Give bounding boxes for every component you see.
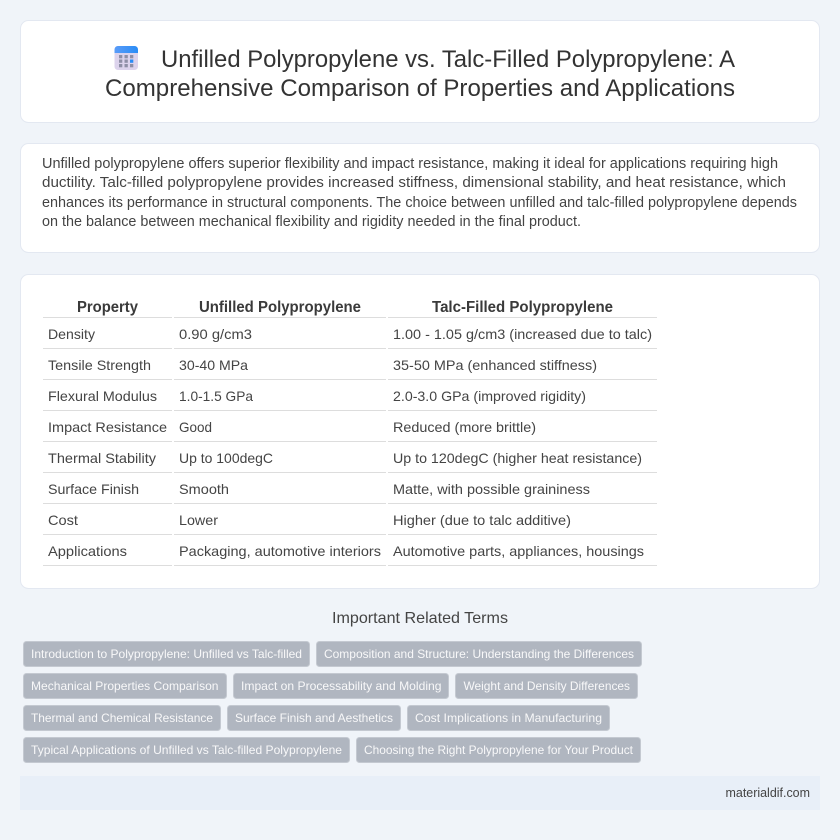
table header: Unfilled Polypropylene: [199, 299, 361, 316]
title: Comprehensive Comparison of Properties and Applications: [105, 75, 735, 102]
tag: Surface Finish and Aesthetics: [235, 711, 393, 725]
tag: Impact on Processability and Molding: [241, 679, 442, 693]
panel: comparison table: [20, 274, 820, 588]
row: tensile strength: Tensile Strength: [48, 357, 151, 373]
row: thermal stability: Thermal Stability: [48, 450, 156, 466]
row: flexural modulus: [48, 388, 586, 404]
icon: calendar: [114, 46, 138, 70]
tag: Typical Applications of Unfilled vs Talc-filled Polypropylene: [31, 743, 342, 757]
row: tensile strength: 35-50 MPa (enhanced stiffness): [393, 357, 597, 373]
row: impact resistance: Good: [179, 419, 212, 435]
text block: summary paragraph: on the balance between mechanical flexibility and rigidity needed in the final product.: [42, 214, 581, 230]
heading: related terms: Important Related Terms: [332, 610, 508, 627]
tag: Mechanical Properties Comparison: [31, 679, 218, 693]
tag: [24, 706, 220, 730]
row: cost: Higher (due to talc additive): [393, 512, 571, 528]
row: flexural modulus: Flexural Modulus: [48, 388, 157, 404]
text block: summary paragraph: [42, 156, 797, 230]
row: cost: Lower: [179, 512, 218, 528]
table header: Property: [77, 299, 138, 316]
footer: [20, 776, 820, 810]
tag: Thermal and Chemical Resistance: [31, 711, 213, 725]
row: applications: Packaging, automotive interiors: [179, 543, 381, 559]
table header: Talc-Filled Polypropylene: [432, 299, 613, 316]
row: cost: [48, 512, 571, 528]
row: surface finish: [48, 481, 590, 497]
title: Unfilled Polypropylene vs. Talc-Filled Polypropylene: A: [161, 46, 735, 73]
row: impact resistance: Impact Resistance: [48, 419, 167, 435]
row: density: [48, 326, 652, 342]
panel: summary: [20, 144, 820, 252]
panel: header: [20, 20, 820, 122]
title: [105, 46, 735, 102]
row: surface finish: Smooth: [179, 481, 229, 497]
row: density: 0.90 g/cm3: [179, 326, 252, 342]
text block: summary paragraph: enhances its performance in structural components. The choice between unfilled and talc-filled polypropylene depends: [42, 195, 797, 211]
row: tensile strength: [48, 357, 597, 373]
row: flexural modulus: 2.0-3.0 GPa (improved rigidity): [393, 388, 586, 404]
tag: Weight and Density Differences: [464, 679, 630, 693]
row: thermal stability: Up to 100degC: [179, 450, 273, 466]
text block: summary paragraph: ductility. Talc-filled polypropylene provides increased stiffness, dimensional stability, and heat resistance, which: [42, 175, 786, 191]
tag: [234, 674, 448, 698]
text block: summary paragraph: Unfilled polypropylene offers superior flexibility and impact resistance, making it ideal for applications requiring high: [42, 156, 778, 172]
footer: materialdif.com: [726, 786, 810, 800]
tag: Cost Implications in Manufacturing: [415, 711, 602, 725]
row: thermal stability: Up to 120degC (higher heat resistance): [393, 450, 642, 466]
tag: [24, 642, 310, 666]
tag: [24, 674, 226, 698]
tag: [316, 642, 642, 666]
row: applications: Automotive parts, appliances, housings: [393, 543, 644, 559]
row: surface finish: Matte, with possible graininess: [393, 481, 590, 497]
row: impact resistance: Reduced (more brittle): [393, 419, 536, 435]
row: flexural modulus: 1.0-1.5 GPa: [179, 388, 253, 404]
tag: [228, 706, 400, 730]
tag: [408, 706, 610, 730]
tag: Choosing the Right Polypropylene for Your Product: [364, 743, 634, 757]
tag: [356, 738, 640, 762]
row: tensile strength: 30-40 MPa: [179, 357, 248, 373]
tag: [24, 738, 350, 762]
tag: [456, 674, 638, 698]
row: impact resistance: [48, 419, 536, 435]
tag: Introduction to Polypropylene: Unfilled vs Talc-filled: [31, 647, 302, 661]
row: applications: [48, 543, 644, 559]
row: surface finish: Surface Finish: [48, 481, 139, 497]
row: thermal stability: [48, 450, 642, 466]
tag: Composition and Structure: Understanding the Differences: [324, 647, 634, 661]
row: density: 1.00 - 1.05 g/cm3 (increased due to talc): [393, 326, 652, 342]
panel: related term tags: [24, 642, 642, 762]
row: density: Density: [48, 326, 95, 342]
row: cost: Cost: [48, 512, 78, 528]
table header: [77, 299, 613, 316]
row: applications: Applications: [48, 543, 127, 559]
